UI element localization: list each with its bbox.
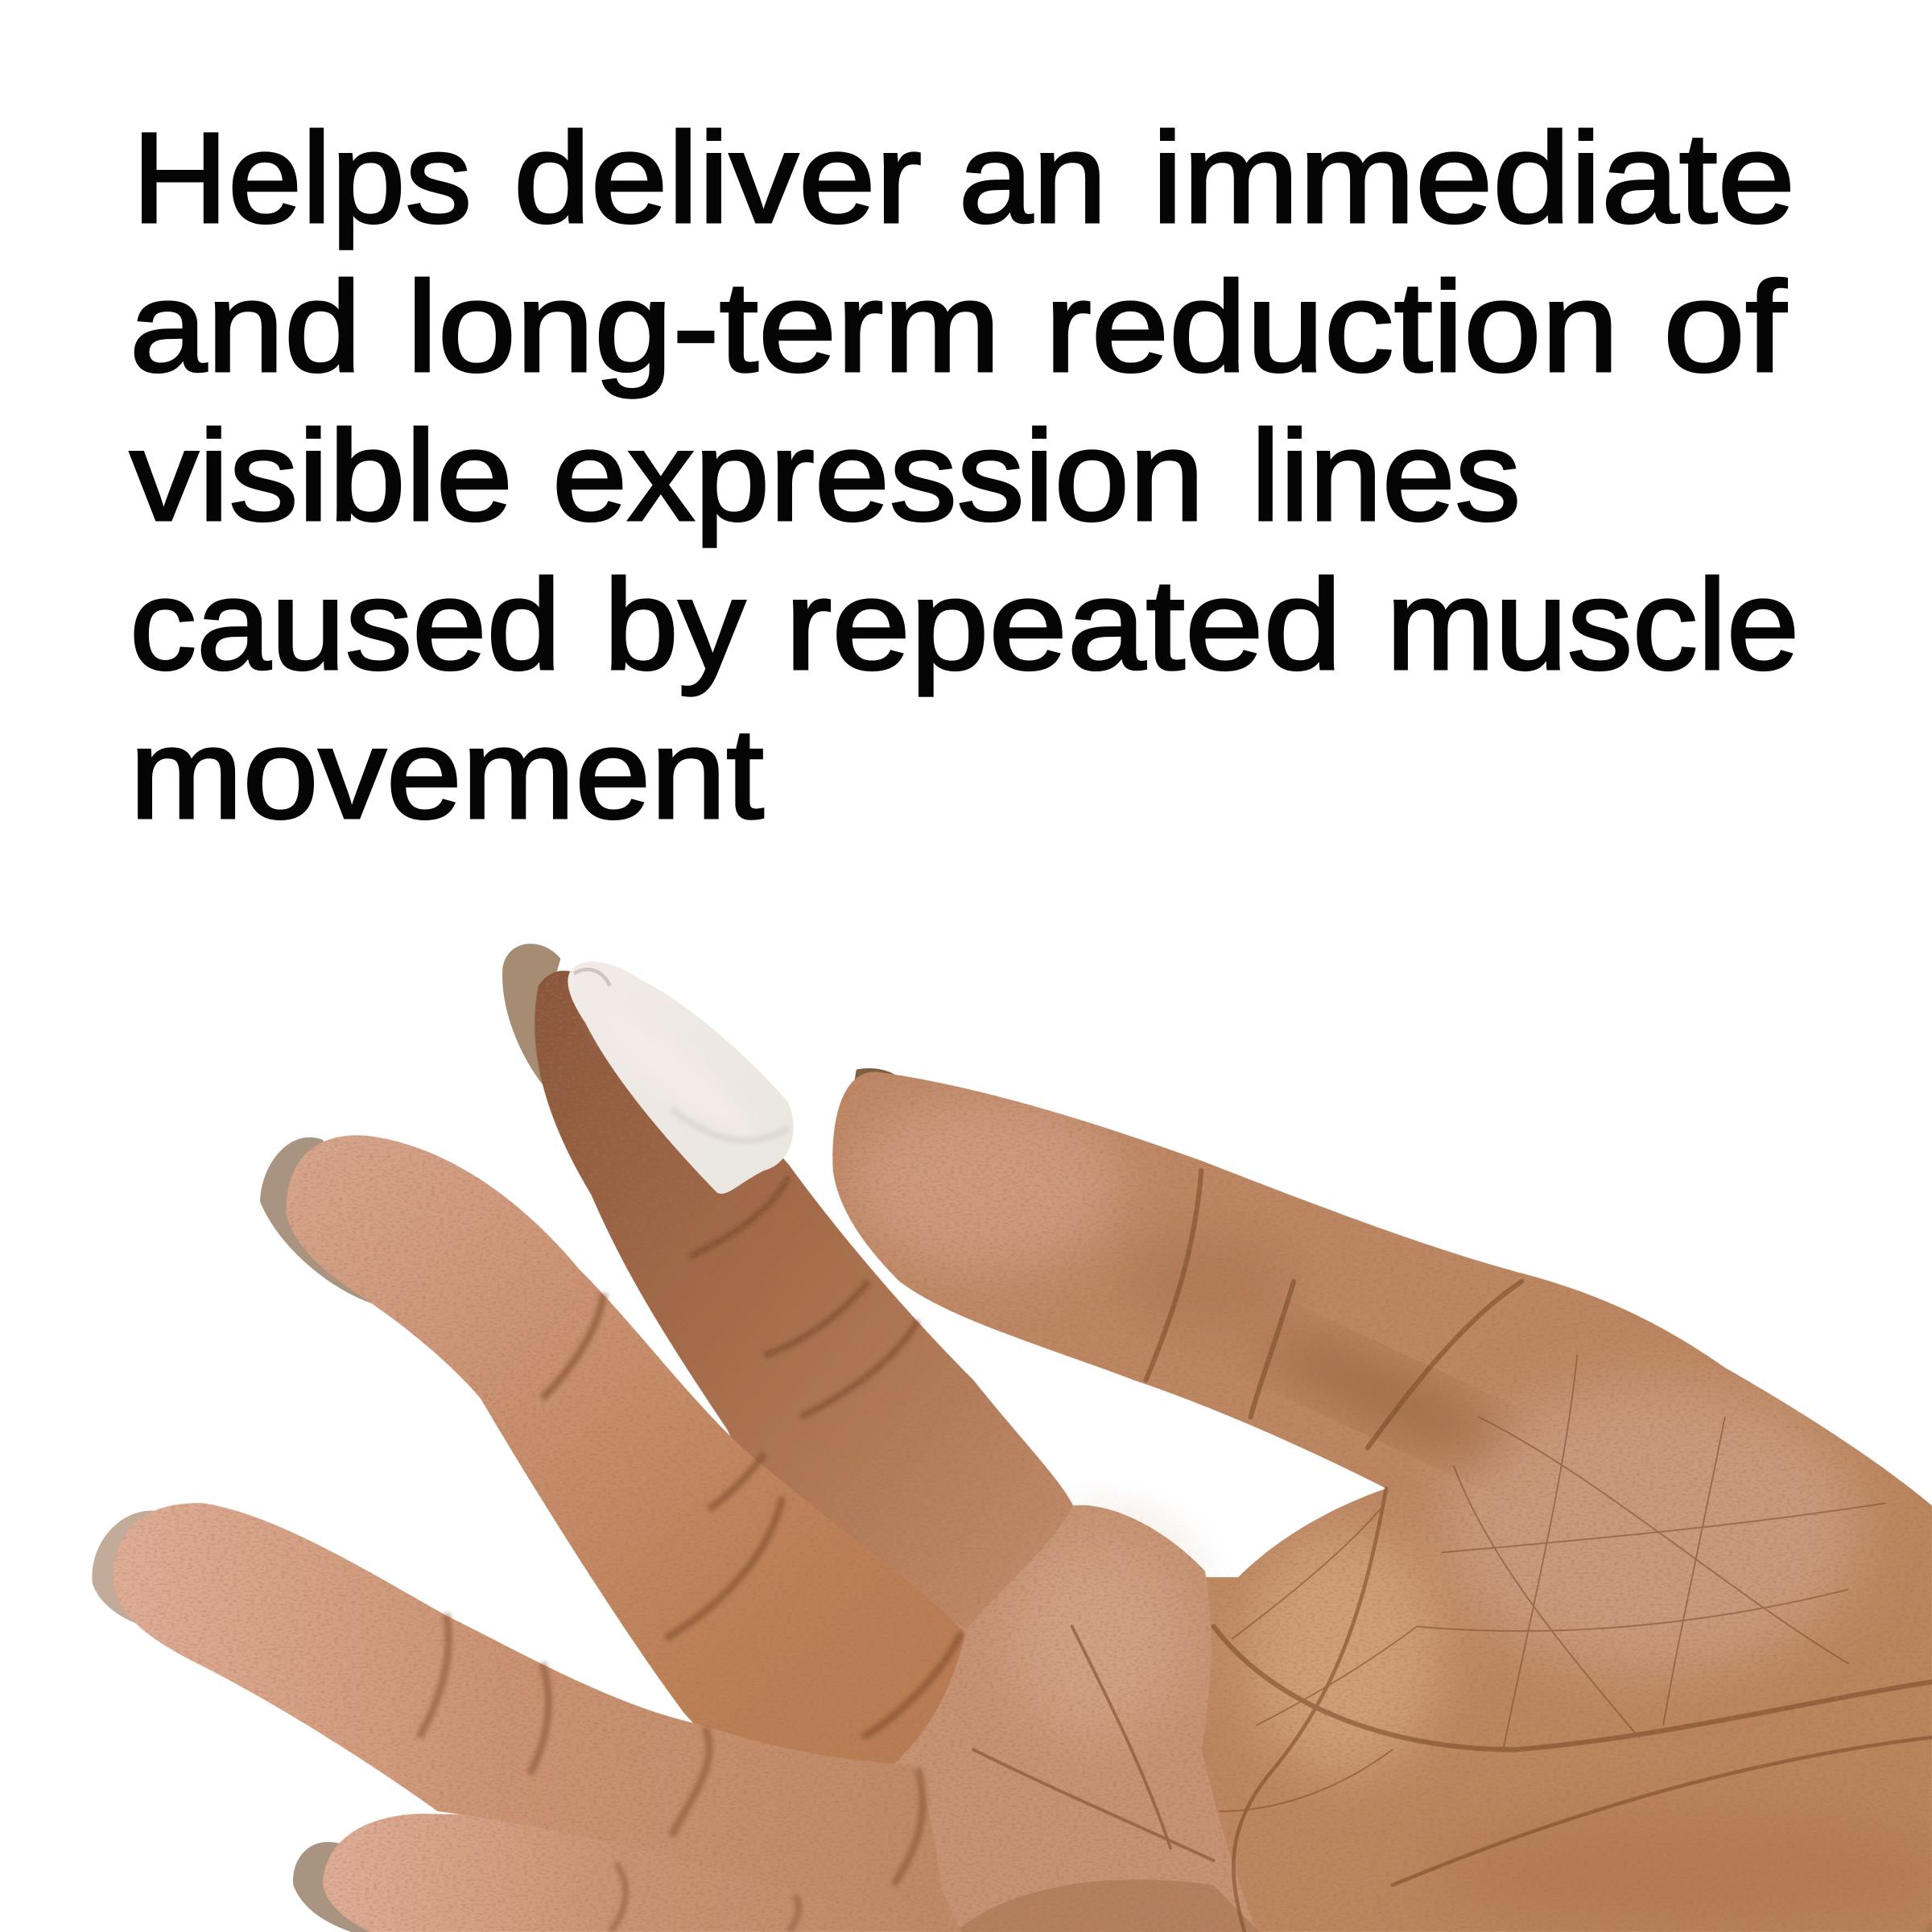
- title: caused: [130, 552, 561, 696]
- title: by: [604, 552, 745, 696]
- title: lines: [1251, 403, 1521, 547]
- title: expression: [552, 403, 1204, 547]
- index finger: [535, 971, 1073, 1629]
- title: repeated: [785, 552, 1342, 696]
- thenar mound at finger bases: [887, 1505, 1259, 1932]
- little finger: [114, 1503, 949, 1928]
- title: muscle: [1386, 552, 1799, 696]
- title: immediate: [1152, 105, 1795, 250]
- title: and: [130, 254, 361, 398]
- lowest finger: [323, 1814, 961, 1932]
- title: [128, 105, 1799, 845]
- main palm and upper finger: [832, 1072, 1932, 1932]
- title: long-term: [407, 254, 1001, 398]
- title: of: [1663, 254, 1787, 398]
- title: an: [959, 105, 1107, 250]
- middle finger: [286, 1135, 964, 1799]
- cream dollop on fingertip: [568, 961, 794, 1194]
- title: visible: [130, 403, 513, 547]
- title: Helps: [132, 105, 472, 250]
- nails: [92, 943, 906, 1932]
- palm creases: [973, 1170, 1932, 1932]
- title: reduction: [1045, 254, 1619, 398]
- skin of the whole hand: [114, 971, 1932, 1932]
- title: movement: [130, 701, 764, 845]
- title: deliver: [514, 105, 922, 250]
